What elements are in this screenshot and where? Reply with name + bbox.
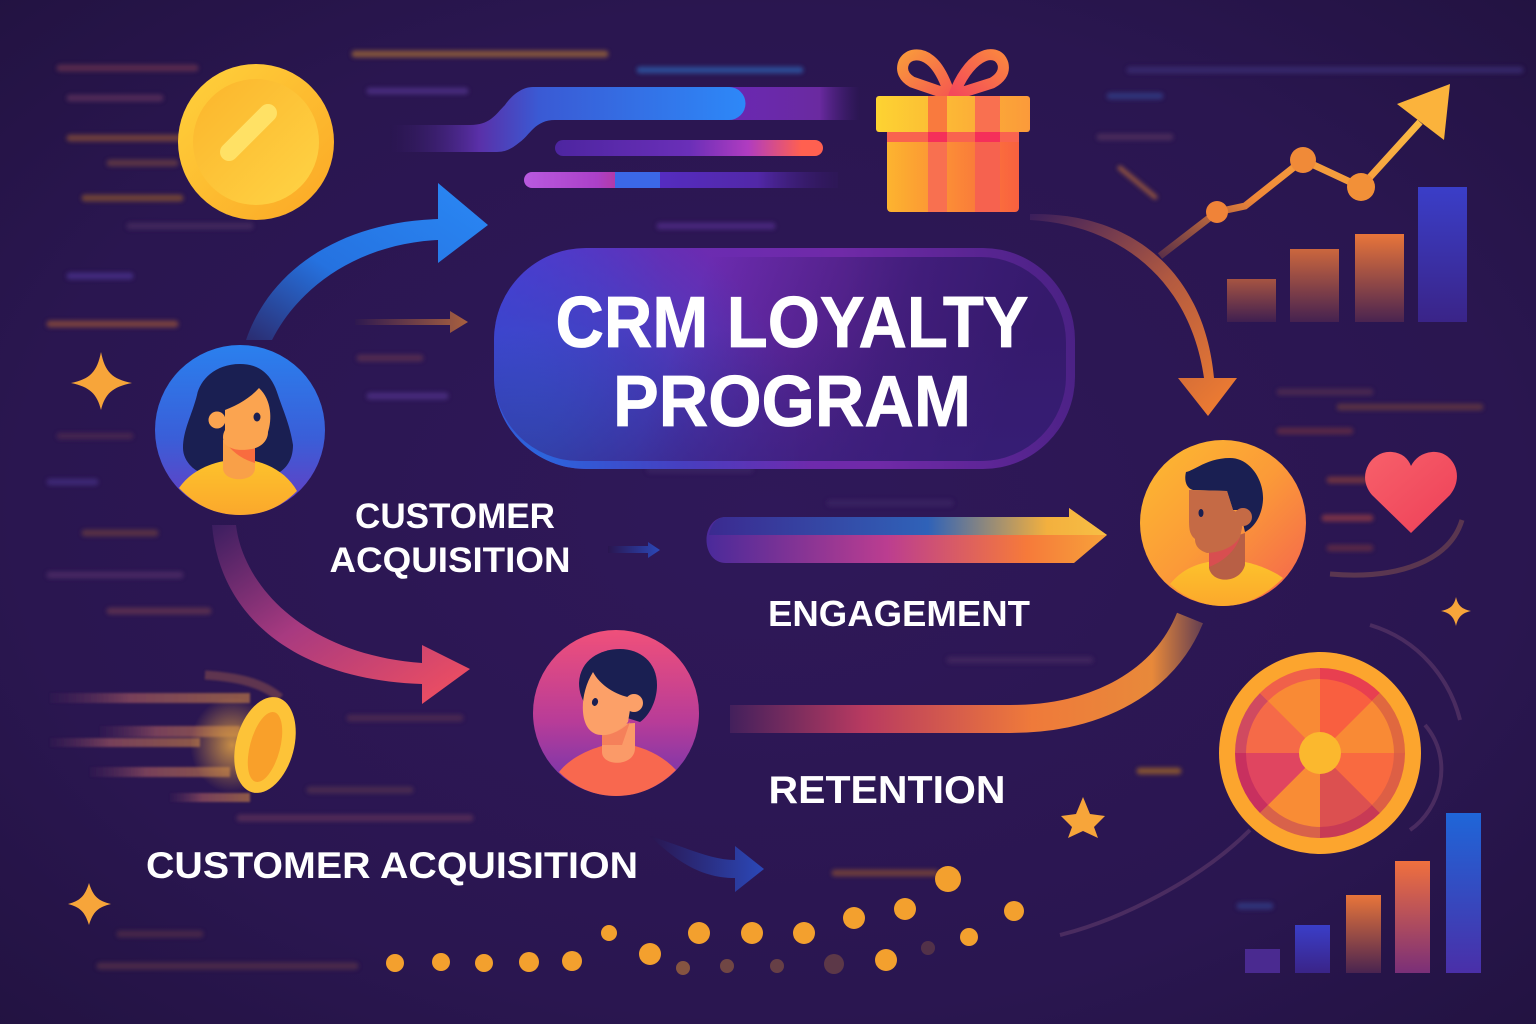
decorative top ribbon bars	[390, 87, 860, 188]
label: customer acquisition lower: CUSTOMER ACQUISITION	[146, 845, 638, 886]
bar chart	[1227, 187, 1467, 322]
arrow: engagement bar	[706, 508, 1107, 563]
arrow: customer acquisition blue curve	[246, 183, 488, 340]
arrow: lower blue pointer	[650, 836, 764, 892]
bar: wavy blue ribbon	[390, 87, 746, 152]
icon: star	[1061, 797, 1105, 838]
icon: prize wheel	[1060, 625, 1460, 935]
icon: customer avatar man	[1140, 440, 1306, 606]
icon: flying coin	[50, 675, 306, 802]
icon: sparkle left	[71, 352, 132, 410]
icon: sparkle bottom left	[68, 883, 111, 925]
icon: customer avatar woman	[155, 345, 325, 515]
icon: gift box	[876, 55, 1030, 212]
title second line: PROGRAM	[613, 362, 971, 442]
dots: points trail	[386, 866, 1024, 975]
label: retention: RETENTION	[768, 769, 1006, 812]
arrow: red curve to second customer	[212, 525, 470, 704]
trend line	[1160, 84, 1450, 256]
label: customer acquisition: CUSTOMER	[355, 497, 555, 536]
label: customer acquisition	[330, 497, 570, 580]
icon: heart	[1330, 452, 1462, 575]
icon: customer avatar short hair	[533, 630, 699, 796]
bar: purple and blue	[524, 172, 838, 188]
label: engagement: ENGAGEMENT	[768, 593, 1030, 634]
decorative bar with small arrow	[216, 914, 442, 922]
chart: upper right trend with bars	[1160, 84, 1467, 322]
title: CRM LOYALTY	[556, 283, 1028, 363]
arrow: small blue pointer	[608, 542, 660, 558]
icon: gold coin	[178, 64, 334, 220]
icon: sparkle right	[1441, 597, 1471, 626]
arrow: orange curve from pill to third customer	[1030, 214, 1237, 416]
label: customer acquisition: ACQUISITION	[330, 541, 570, 580]
bar: purple ribbon tail	[725, 87, 860, 120]
panel: central title pill	[494, 248, 1075, 469]
bar: purple to red	[555, 140, 823, 156]
arrow: retention arc	[730, 618, 1190, 719]
arrow: small brown pointer	[355, 311, 468, 333]
chart: lower right bars	[1245, 813, 1481, 973]
